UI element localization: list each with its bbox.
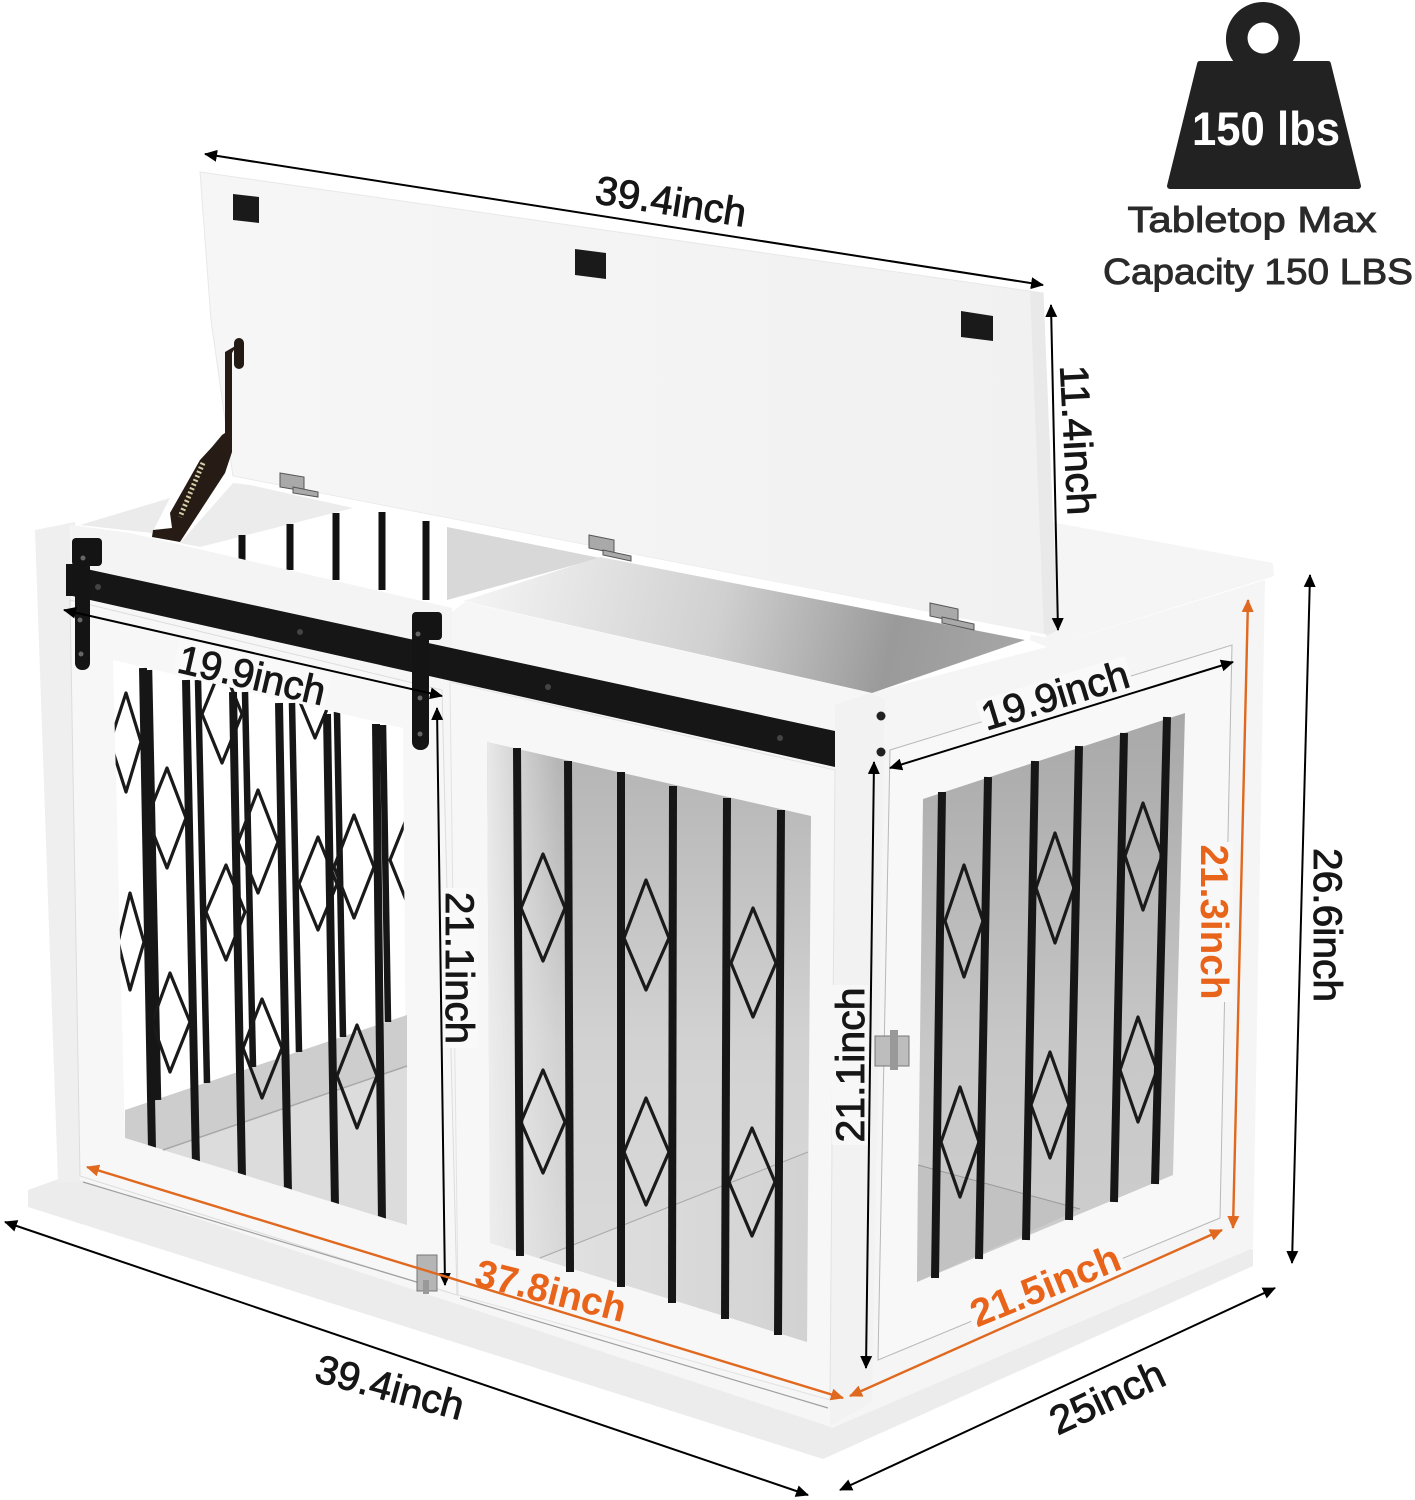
arrow: left door height [437,708,445,1285]
latch side [875,1030,909,1070]
label halos [172,639,1233,1332]
arrow: inner length [87,1167,843,1398]
label: inner length: 37.8inch [471,1252,631,1331]
arrow: inner height [1233,600,1248,1228]
lid edge [1030,291,1057,635]
corner post [830,693,885,1426]
door diamonds [114,684,404,1130]
label: side door width: 19.9inch [976,653,1134,739]
lid lip [233,478,1046,636]
base plinth [28,1175,1253,1459]
front bars [143,668,382,1222]
capacity caption: Capacity 150 LBS [1103,251,1413,292]
label: left door width: 19.9inch [174,638,330,714]
capacity caption: Tabletop Max [1128,199,1376,240]
label: inner height: 21.3inch [1192,844,1235,1000]
right side face [832,580,1265,1428]
label: lid height: 11.4inch [1051,364,1103,516]
sliding hanger right [412,612,442,750]
label: lid width: 39.4inch [592,168,749,236]
right door frame [878,645,1232,1360]
right bars [935,717,1167,1278]
label: total length: 39.4inch [311,1347,469,1429]
right diamonds [941,803,1162,1197]
right door opening [917,713,1185,1282]
lid stay [152,338,244,542]
middle bars [517,748,781,1335]
middle door opening [487,742,811,1342]
arrow: side door height [866,762,874,1368]
crate furniture [28,172,1274,1459]
label: total depth: 25inch [1043,1352,1172,1444]
label: inner depth: 21.5inch [964,1237,1127,1336]
front face [70,525,870,1428]
lid hinges [280,473,974,630]
arrow: left door width [64,610,442,696]
sliding hanger left [66,538,102,670]
barn door rail [68,565,835,767]
rail bolts [95,584,783,741]
back bars [149,670,388,1100]
arrow: side door width [890,662,1233,768]
latch front [417,1255,437,1294]
label: side door height: 21.1inch [829,988,873,1142]
left post [35,522,86,1183]
left compartment opening [72,483,452,650]
lid pads [233,194,993,341]
left door frame [70,600,457,1295]
arrow: total height [1292,575,1310,1263]
arrow: total depth [840,1288,1275,1490]
arrow: inner depth [850,1230,1222,1396]
arrow: lid height [1051,305,1058,630]
arrow: total length [5,1222,808,1495]
storage divider [447,527,600,600]
tabletop [1030,520,1274,647]
middle door frame [450,682,835,1400]
capacity caption [1103,199,1413,292]
middle diamonds [521,854,776,1236]
screws on corner post [876,712,886,756]
right storage compartment [463,557,1025,693]
left door opening [114,668,408,1225]
weight value: 150 lbs [1192,102,1340,155]
label: total height: 26.6inch [1305,848,1349,1002]
bottom seam [83,1182,828,1408]
weight icon [1170,2,1358,186]
label: left door height: 21.1inch [437,892,481,1044]
arrow: lid width [205,154,1043,285]
open lid [200,172,1057,635]
